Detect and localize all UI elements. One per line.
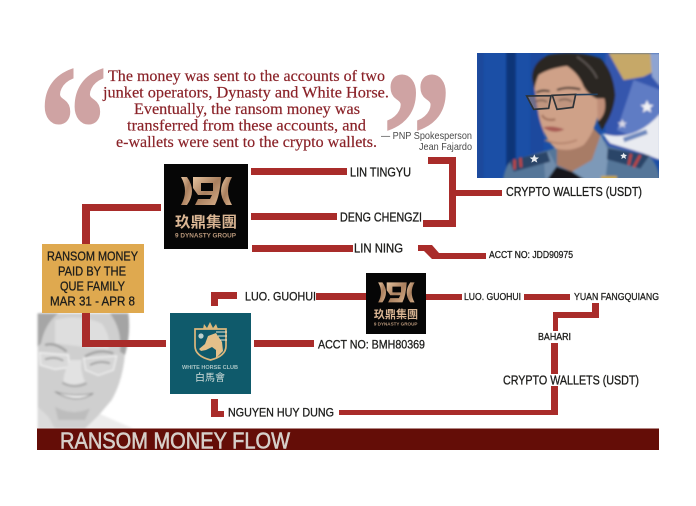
box: ransom money paid: RANSOM MONEY (47, 248, 138, 264)
quote attribution (381, 130, 472, 153)
quote text: The money was sent to the accounts of two (108, 68, 385, 85)
logo: White Horse Club: 白馬會 (195, 369, 225, 384)
label: Nguyen Huy Dung: NGUYEN HUY DUNG (228, 406, 334, 420)
photo: PNP spokesperson Jean Fajardo (477, 50, 660, 180)
label: crypto wallets lower: CRYPTO WALLETS (USDT) (503, 374, 639, 388)
box: ransom money paid: PAID BY THE (58, 264, 126, 278)
connector: Bahari to crypto wallets (551, 343, 558, 374)
connector: Lin Ning to account (418, 245, 486, 259)
label: Deng Chengzi: DENG CHENGZI (340, 210, 422, 224)
connector: Lin Ning (252, 245, 353, 252)
connector: Nguyen Huy Dung to crypto wallets (339, 386, 558, 415)
quote mark: opening: “ (39, 29, 107, 227)
connector: family to Dynasty (82, 204, 161, 244)
quote attribution: — PNP Spokesperson (381, 130, 472, 142)
photo: old man, Que family (38, 313, 133, 429)
label: Lin Tingyu: LIN TINGYU (350, 166, 411, 180)
quote text (102, 68, 389, 151)
connector: Luo Guohui to Yuan Fangquiang (524, 294, 570, 300)
logo: White Horse Club: WHITE HORSE CLUB (182, 365, 238, 371)
logo: 9 Dynasty Group (top): 玖鼎集團 (175, 211, 237, 232)
label: crypto wallets top: CRYPTO WALLETS (USDT) (506, 185, 642, 199)
connector: Yuan Fangquiang to Bahari (553, 303, 599, 331)
connector: White Horse to Nguyen Huy Dung (211, 399, 224, 417)
box: ransom money paid: QUE FAMILY (60, 278, 125, 294)
quote mark: closing: ” (383, 35, 451, 233)
label: Luo Guohui small: LUO. GUOHUI (464, 291, 521, 303)
label: Yuan Fangquiang: YUAN FANGQUIANG (574, 291, 659, 303)
connector: Luo Guohui to Dynasty (316, 293, 366, 300)
logo: 9 Dynasty Group (lower): 9 DYNASTY GROUP (374, 322, 418, 327)
label: Luo Guohui: LUO. GUOHUI (245, 290, 316, 304)
logo: 9 Dynasty Group (lower): 玖鼎集團 (374, 307, 418, 322)
connector: Dynasty to second Luo Guohui (426, 294, 462, 300)
label: account BMH80369: ACCT NO: BMH80369 (318, 338, 425, 352)
label: account JDD90975: ACCT NO: JDD90975 (489, 249, 573, 261)
logo: 9 Dynasty Group (top): 9 DYNASTY GROUP (175, 234, 236, 240)
box: ransom money paid (42, 244, 144, 313)
logo: White Horse Club (170, 313, 251, 394)
label: Lin Ning: LIN NING (354, 242, 403, 256)
connector: Lin Tingyu (251, 168, 347, 175)
logo: 9 Dynasty Group (top) (164, 164, 248, 249)
box: ransom money paid: MAR 31 - APR 8 (50, 294, 135, 308)
label: Bahari: BAHARI (538, 332, 571, 343)
title bar: ransom money flow: RANSOM MONEY FLOW (60, 428, 290, 454)
connector: White Horse to account (254, 340, 314, 347)
connector: White Horse to Luo Guohui (211, 292, 237, 306)
logo: 9 Dynasty Group (lower) (366, 273, 426, 334)
quote text: junket operators, Dynasty and White Horse. (102, 84, 389, 102)
connector: family to White Horse (82, 313, 166, 347)
quote text: Eventually, the ransom money was (134, 101, 360, 118)
connector: bracket to crypto wallets (423, 157, 502, 227)
quote text: transferred from these accounts, and (127, 118, 366, 134)
connector: Deng Chengzi (251, 213, 337, 220)
title bar: ransom money flow (37, 428, 659, 454)
quote attribution: Jean Fajardo (419, 141, 472, 153)
glasses (527, 94, 598, 109)
quote text: e-wallets were sent to the crypto wallets. (116, 134, 377, 151)
